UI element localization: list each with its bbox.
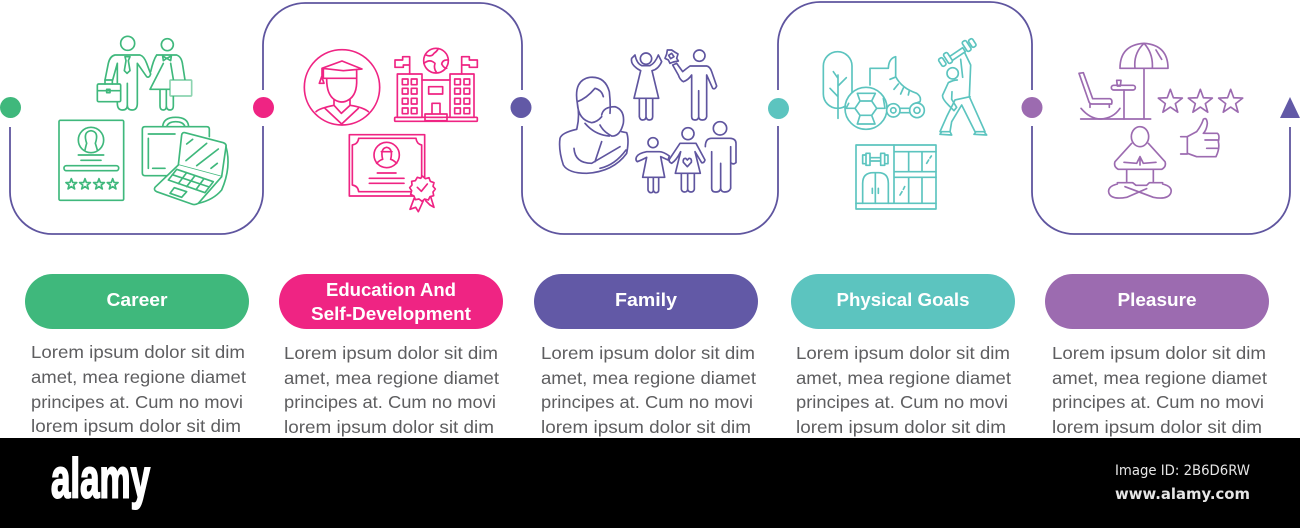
body text: pleasure: Lorem ipsum dolor sit dim [1052,343,1266,363]
body text: education: amet, mea regione diamet [284,368,499,388]
icon group: education [304,48,477,212]
heading pill: pleasure: Pleasure [1118,290,1196,310]
body text: education [284,343,499,437]
heading pill: education and self-development: Education And [326,280,456,300]
heading pill: family [534,274,758,329]
icon group: family [560,50,736,193]
body text: career: lorem ipsum dolor sit dim [31,416,241,436]
body text: education: principes at. Cum no movi [284,392,496,412]
website: www.alamy.com [1115,485,1250,503]
heading pill: career: Career [106,290,168,310]
body text: education: Lorem ipsum dolor sit dim [284,343,498,363]
end marker: triangle arrow [1280,97,1300,118]
step marker: purple dot [510,97,532,118]
heading pill: physical goals [791,274,1015,329]
heading pill: pleasure [1045,274,1269,329]
heading pill: education and self-development [279,274,503,329]
heading pill: career [25,274,249,329]
icon group: career [59,36,228,205]
body text: pleasure [1052,343,1267,437]
step marker: pink dot [253,97,274,118]
heading pill: education and self-development: Self-Development [311,304,471,324]
body text: pleasure: amet, mea regione diamet [1052,368,1267,388]
body text: physical goals: amet, mea regione diamet [796,368,1011,388]
body text: physical goals: Lorem ipsum dolor sit dim [796,343,1010,363]
body text: career [31,342,246,436]
body text: physical goals: principes at. Cum no movi [796,392,1008,412]
body text: family: Lorem ipsum dolor sit dim [541,343,755,363]
heading pill: physical goals: Physical Goals [836,290,970,310]
body text: physical goals [796,343,1011,437]
step marker: violet dot [1022,97,1042,118]
image id: Image ID: 2B6D6RW [1115,463,1250,479]
body text: education: lorem ipsum dolor sit dim [284,417,494,437]
body text: career: principes at. Cum no movi [31,392,243,412]
body text: pleasure: lorem ipsum dolor sit dim [1052,417,1262,437]
icon group: pleasure [1079,43,1243,198]
body text: family: principes at. Cum no movi [541,392,753,412]
body text: family: amet, mea regione diamet [541,368,756,388]
body text: career: amet, mea regione diamet [31,367,246,387]
body text: career: Lorem ipsum dolor sit dim [31,342,245,362]
step marker: green dot [0,97,21,118]
watermark logo: alamy [51,446,150,510]
watermark footer band [0,438,1300,528]
icon group: physical goals [823,38,987,209]
body text: family: lorem ipsum dolor sit dim [541,417,751,437]
step marker: teal dot [768,98,789,119]
body text: family [541,343,756,437]
body text: pleasure: principes at. Cum no movi [1052,392,1264,412]
heading pill: family: Family [615,290,677,310]
connected outline frame [10,2,1290,234]
body text: physical goals: lorem ipsum dolor sit dim [796,417,1006,437]
